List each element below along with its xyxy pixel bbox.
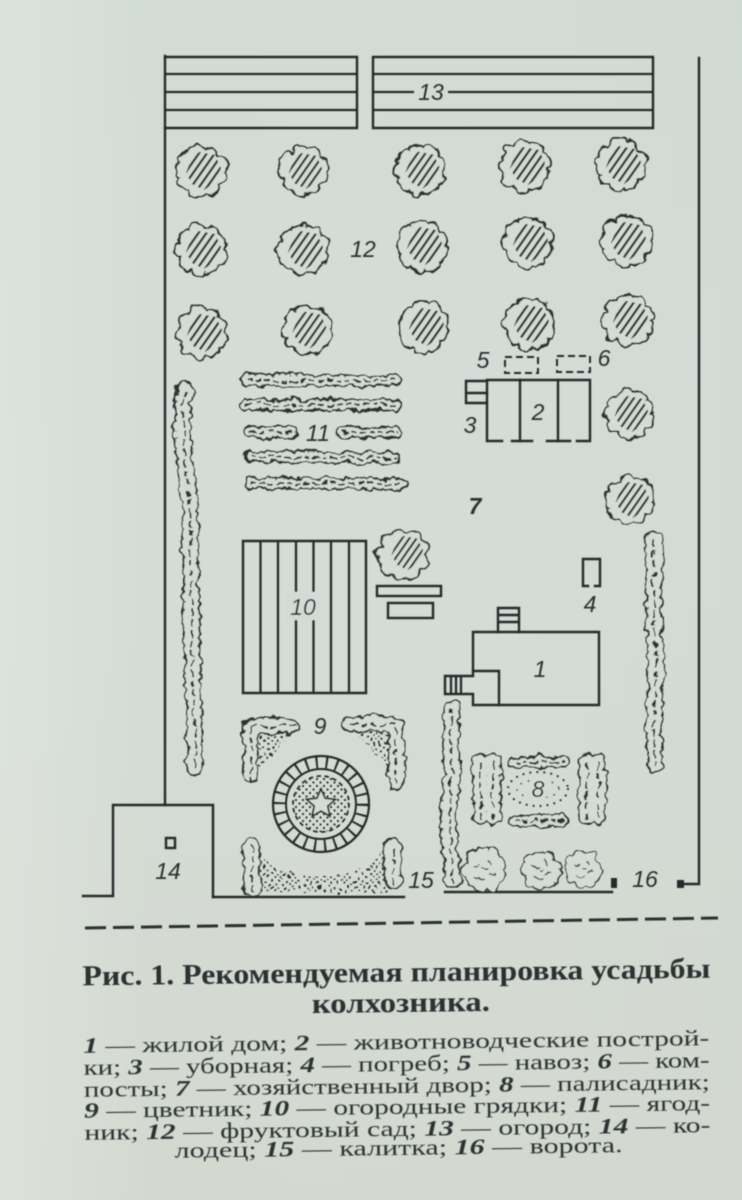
right hedge	[653, 540, 656, 766]
outhouse 3: 3	[464, 412, 477, 438]
shrubs along fence	[462, 848, 601, 892]
caption	[82, 954, 713, 1164]
corner bed bottom	[252, 842, 393, 893]
legend text: посты; 7 — хозяйственный двор; 8 — палисадник;	[84, 1069, 710, 1102]
outhouse 3	[464, 381, 487, 438]
well plot 14: 14	[155, 858, 181, 884]
label 15: 15	[408, 867, 434, 893]
label 10: 10	[290, 594, 316, 620]
bench	[377, 586, 441, 618]
compost pile 6	[557, 345, 611, 372]
front garden 8	[481, 762, 598, 822]
hedges around front garden	[481, 762, 598, 822]
berry rows 11	[246, 380, 400, 484]
well plot 14	[83, 805, 213, 897]
compost pile 6: 6	[598, 345, 611, 371]
left hedge	[183, 390, 195, 768]
dotted oval	[508, 772, 568, 806]
legend text	[83, 1025, 711, 1164]
legend text: 1 — жилой дом; 2 — животноводческие построй-	[83, 1025, 709, 1058]
manure pile 5	[477, 347, 538, 373]
corner bed top left	[248, 724, 298, 782]
label 12: 12	[350, 236, 376, 262]
corner bed top right	[348, 724, 398, 786]
fruit tree row 1	[175, 139, 646, 197]
fruit tree row 3	[176, 294, 653, 359]
cellar 4	[583, 559, 600, 617]
cellar 4: 4	[584, 591, 596, 617]
label 2: 2	[531, 399, 545, 425]
label 8: 8	[532, 776, 545, 802]
label 16: 16	[632, 866, 658, 892]
gate hedge	[449, 708, 452, 884]
label 9: 9	[314, 713, 327, 739]
manure pile 5: 5	[477, 347, 490, 373]
site plan	[83, 56, 699, 897]
fruit tree row 2	[175, 215, 651, 276]
house 1	[445, 608, 599, 705]
house rear steps	[498, 608, 519, 632]
caption title: колхозника.	[312, 987, 490, 1020]
legend text: ки; 3 — уборная; 4 — погреб; 5 — навоз; 6 — ком-	[83, 1047, 710, 1080]
fence outline	[165, 56, 699, 897]
round flower bed with star	[273, 756, 369, 852]
flower garden 9	[248, 713, 398, 893]
label 13: 13	[418, 79, 444, 105]
label 11: 11	[306, 420, 330, 446]
legend text: 9 — цветник; 10 — огородные грядки; 11 — ягод-	[84, 1090, 710, 1123]
label 7: 7	[469, 493, 483, 519]
legend text: лодец; 15 — калитка; 16 — ворота.	[174, 1132, 623, 1163]
vegetable plots 13	[165, 57, 653, 128]
fruit trees on the right and near bench	[376, 389, 654, 582]
legend text: ник; 12 — фруктовый сад; 13 — огород; 14 — ко-	[84, 1112, 710, 1145]
dashed road line	[85, 918, 718, 928]
caption title: Рис. 1. Рекомендуемая планировка усадьбы	[82, 954, 711, 992]
vegetable beds 10	[243, 541, 366, 693]
label 1: 1	[534, 656, 546, 682]
caption title	[82, 954, 711, 1023]
animal buildings 2	[487, 380, 590, 441]
